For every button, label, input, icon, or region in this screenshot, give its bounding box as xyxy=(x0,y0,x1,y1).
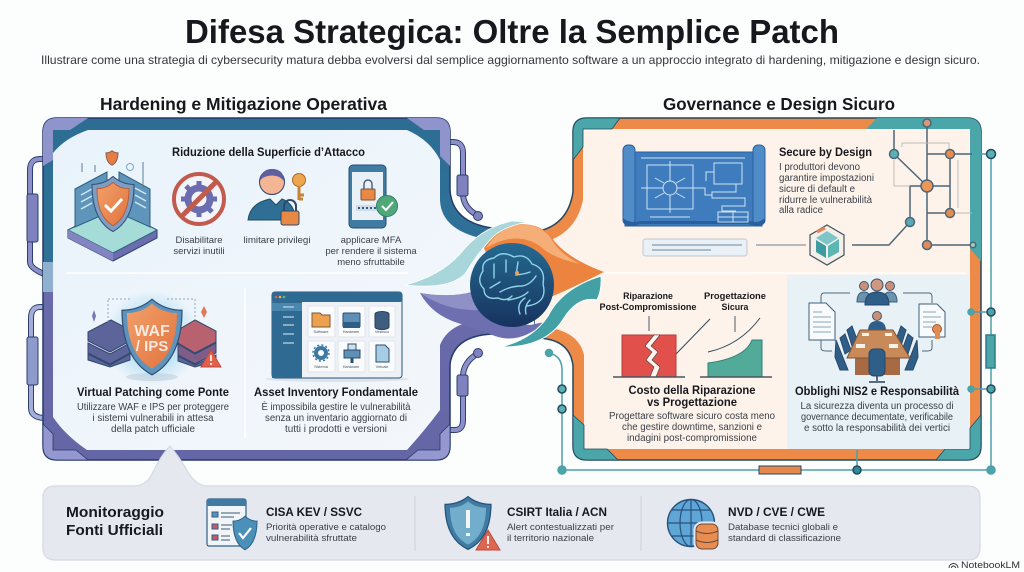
block: Obblighi NIS2 e Responsabilità xyxy=(795,384,959,434)
panel: Monitoraggio Fonti Ufficiali xyxy=(43,446,980,560)
icon: code bar xyxy=(643,239,806,256)
panel: Hardening e Mitigazione Operativa xyxy=(43,118,492,460)
block: CISA KEV / SSVC: vulnerabilità sfruttate xyxy=(266,533,357,543)
block: Secure by Design xyxy=(779,147,874,216)
section: Riduzione della Superficie d'Attacco: Riduzione della Superficie d’Attacco xyxy=(172,147,365,159)
heading: Monitoraggio Fonti Ufficiali xyxy=(66,505,164,539)
block: CISA KEV / SSVC: CISA KEV / SSVC xyxy=(266,507,362,519)
icon: asset inventory window: Hardware xyxy=(343,365,359,369)
block: Costo della Riparazione: vs Progettazione xyxy=(647,395,737,409)
icon: asset inventory window: Vestisco xyxy=(375,330,389,334)
icon: secure cube xyxy=(810,225,844,265)
icon: asset inventory window: Hardware xyxy=(343,330,359,334)
block: Obblighi NIS2 e Responsabilità: Obblighi NIS2 e Responsabilità xyxy=(795,384,959,398)
icon: CSIRT shield alert xyxy=(445,497,500,550)
block: CSIRT Italia / ACN: CSIRT Italia / ACN xyxy=(507,507,607,519)
panel: Governance e Design Sicuro xyxy=(535,118,981,460)
block: Asset Inventory Fondamentale: È impossibila gestire le vulnerabilità xyxy=(262,402,411,413)
block: CSIRT Italia / ACN: Alert contestualizzati per xyxy=(507,522,614,532)
chart: repair vs design cost: Post-Compromissione xyxy=(600,302,697,312)
block: Costo della Riparazione: Costo della Riparazione xyxy=(628,383,756,397)
block: Obblighi NIS2 e Responsabilità: e sotto la responsabilità dei vertici xyxy=(804,423,950,434)
block: Asset Inventory Fondamentale xyxy=(254,385,418,435)
label: limitare privilegi: limitare privilegi xyxy=(244,235,310,246)
block: CSIRT Italia / ACN xyxy=(507,507,614,543)
block: Secure by Design: I produttori devono xyxy=(779,162,860,173)
label: applicare MFA: meno sfruttabile xyxy=(337,257,405,268)
icon: isometric protected platform xyxy=(68,151,157,261)
block: Secure by Design: sicure di default e xyxy=(779,184,855,195)
heading: Monitoraggio Fonti Ufficiali: Monitoraggio xyxy=(66,505,164,521)
icon: asset inventory window xyxy=(265,292,409,382)
block: Asset Inventory Fondamentale: senza un inventario aggiornato di xyxy=(265,413,407,424)
block: Costo della Riparazione xyxy=(609,383,775,444)
label: applicare MFA: applicare MFA xyxy=(341,235,402,246)
chart: repair vs design cost: Sicura xyxy=(722,302,749,312)
block: Costo della Riparazione: Progettare software sicuro costa meno xyxy=(609,411,775,422)
block: CISA KEV / SSVC: Priorità operative e catalogo xyxy=(266,522,386,532)
chart: repair vs design cost: Riparazione xyxy=(623,291,673,301)
icon: asset inventory window: Software xyxy=(314,330,328,334)
block: Costo della Riparazione: indagini post-compromissione xyxy=(627,433,757,444)
label: disabilitare servizi inutili xyxy=(173,235,225,257)
icon: WAF / IPS shield between servers: WAF xyxy=(134,323,170,340)
brain circle xyxy=(470,243,554,327)
block: Costo della Riparazione: che gestire downtime, sanzioni e xyxy=(622,422,762,433)
block: NVD / CVE / CWE xyxy=(728,507,841,543)
label: disabilitare servizi inutili: Disabilitare xyxy=(176,235,222,246)
chart: repair vs design cost: Progettazione xyxy=(704,291,766,301)
connector tubes: left panel xyxy=(27,142,482,430)
block: Secure by Design: Secure by Design xyxy=(779,147,872,159)
label: disabilitare servizi inutili: servizi inutili xyxy=(173,246,225,257)
circuit network xyxy=(852,119,976,250)
icon: WAF / IPS shield between servers xyxy=(88,290,221,386)
icon: WAF / IPS shield between servers: / IPS xyxy=(136,338,168,355)
block: Asset Inventory Fondamentale: tutti i prodotti e versioni xyxy=(285,424,387,435)
block: Secure by Design: alla radice xyxy=(779,205,823,216)
icon: global database xyxy=(668,500,719,550)
heading: left column: Hardening e Mitigazione Operativa xyxy=(100,94,387,114)
block: Secure by Design: ridurre le vulnerabilità xyxy=(779,195,873,206)
subtitle: Illustrare come una strategia di cybersecurity matura debba evolversi dal semplice aggiornamento software a un approccio integrato di hardening, mitigazione e design sicuro. xyxy=(41,53,980,67)
chart: repair vs design cost xyxy=(600,291,772,377)
heading: right column: Governance e Design Sicuro xyxy=(663,94,895,114)
icon: disabled gear xyxy=(174,174,224,224)
icon: governance boardroom xyxy=(809,279,945,382)
heading: Monitoraggio Fonti Ufficiali: Fonti Ufficiali xyxy=(66,523,163,539)
label: applicare MFA xyxy=(325,235,417,268)
block: NVD / CVE / CWE: Database tecnici globali e xyxy=(728,522,838,532)
icon: CISA catalogue xyxy=(207,499,257,550)
block: Asset Inventory Fondamentale: Asset Inventory Fondamentale xyxy=(254,385,418,399)
central brain hub xyxy=(405,221,604,347)
icon: blueprint xyxy=(623,145,765,226)
icon: asset inventory window: Virtuale xyxy=(376,365,388,369)
block: Obblighi NIS2 e Responsabilità: governance decumentate, verificabile xyxy=(801,412,953,423)
block: NVD / CVE / CWE: NVD / CVE / CWE xyxy=(728,507,825,519)
icon: phone with MFA xyxy=(349,165,398,228)
title: Difesa Strategica: Oltre la Semplice Patch xyxy=(185,13,839,50)
watermark: NotebookLM: NotebookLM xyxy=(961,560,1020,571)
label: applicare MFA: per rendere il sistema xyxy=(325,246,417,257)
block: Secure by Design: garantire impostazioni xyxy=(779,173,874,184)
block: CISA KEV / SSVC xyxy=(266,507,386,543)
block: Virtual Patching come Ponte: della patch ufficiale xyxy=(111,424,195,435)
block: Obblighi NIS2 e Responsabilità: La sicurezza diventa un processo di xyxy=(800,401,954,412)
block: CSIRT Italia / ACN: il territorio nazionale xyxy=(507,533,594,543)
icon: asset inventory window: Sistema xyxy=(314,365,329,369)
block: Virtual Patching come Ponte xyxy=(77,385,229,435)
block: Virtual Patching come Ponte: i sistemi vulnerabili in attesa xyxy=(92,413,214,424)
block: Virtual Patching come Ponte: Utilizzare WAF e IPS per proteggere xyxy=(77,402,229,413)
block: NVD / CVE / CWE: standard di classificazione xyxy=(728,533,841,543)
block: Virtual Patching come Ponte: Virtual Patching come Ponte xyxy=(77,385,229,399)
icon: user with key and lock xyxy=(248,169,306,225)
connector circuit: right panel xyxy=(546,150,996,474)
